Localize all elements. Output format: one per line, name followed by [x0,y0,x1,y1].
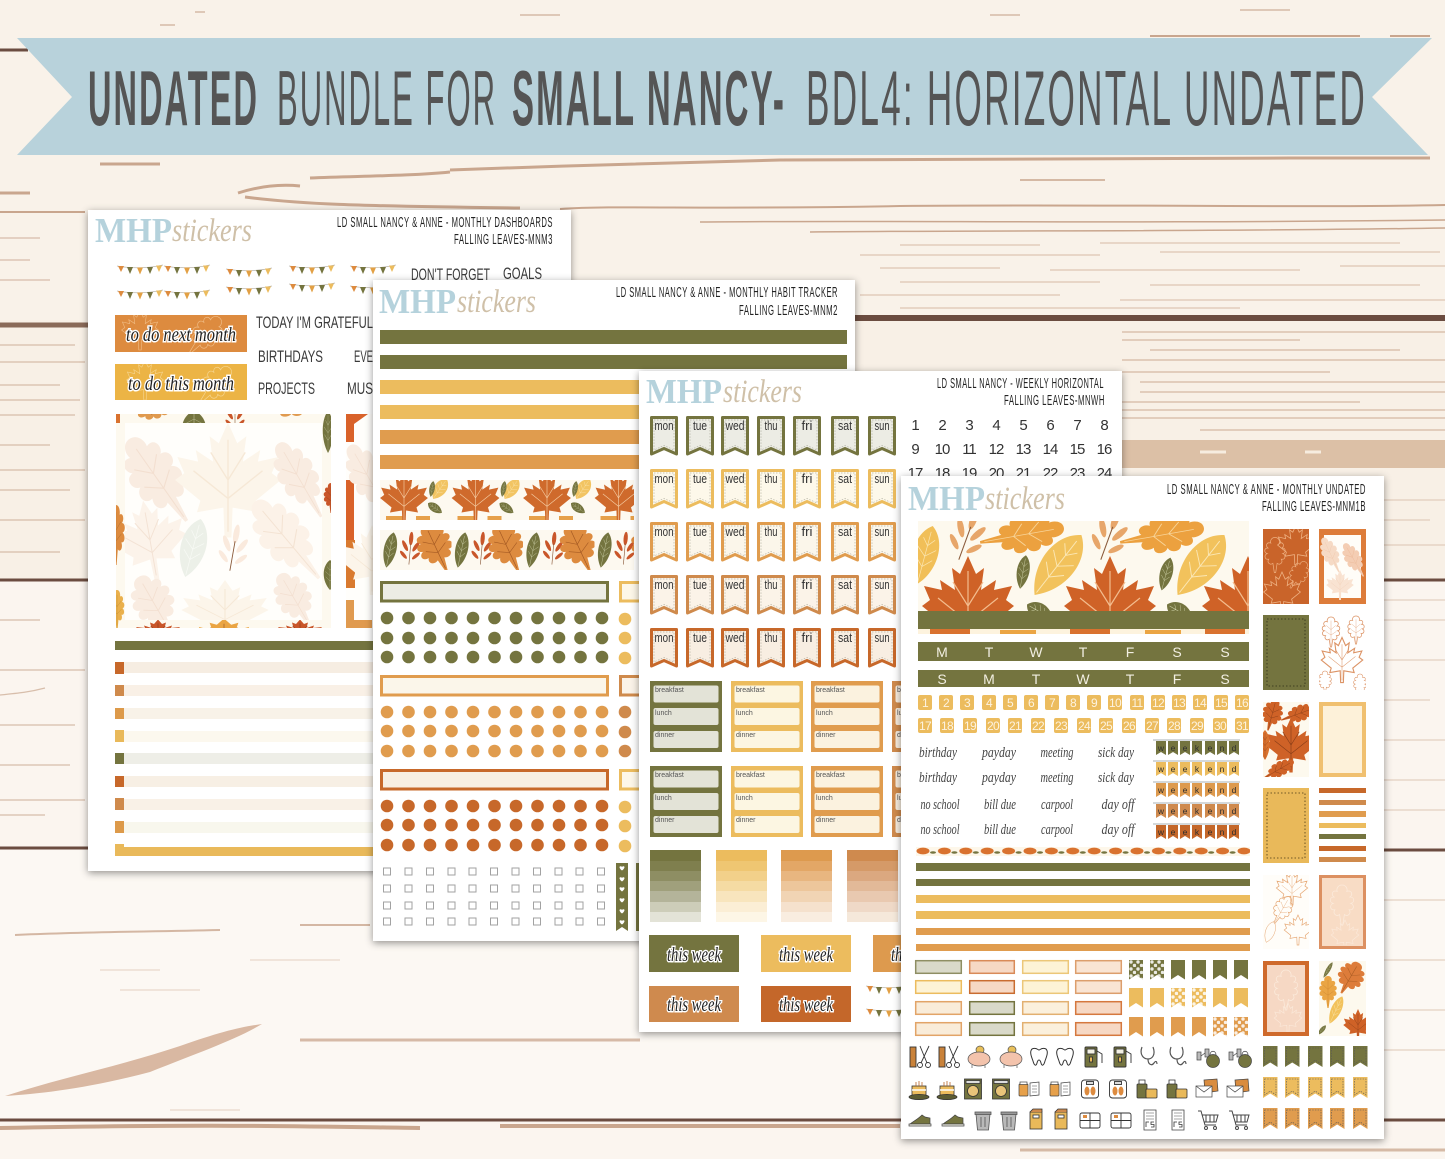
sheet 2: monthly habit tracker [373,280,855,941]
calendar numbers: 5 [1019,417,1027,434]
header labels: TODAY I'M GRATEFUL [256,313,373,332]
script event words: no school [920,797,960,813]
sheet title: FALLING LEAVES-MNWH [1004,393,1105,409]
calendar numbers: 9 [911,441,919,458]
date squares: 16 [1236,696,1249,710]
title boxes [382,582,650,789]
weekday flags: sat [838,524,852,539]
weekday flags: mon [654,524,674,539]
weekday flags: mon [654,630,674,645]
weekend banners: e [1183,827,1188,837]
this week labels: this week [667,994,722,1016]
calendar numbers: 6 [1046,417,1054,434]
weekend banners: d [1232,764,1237,774]
sheet 1: monthly dashboards [88,210,571,871]
header labels: DON'T FORGET [411,265,490,284]
weekend banners: d [1232,785,1237,795]
meal planner blocks: breakfast [655,687,684,694]
logo: stickers [985,481,1065,517]
logo [380,289,536,313]
small title boxes [916,961,1121,1035]
heart strip [616,863,640,931]
leaf washi strips [380,480,634,570]
sheet 3: weekly horizontal [639,371,1122,1032]
sheet title [616,287,838,315]
this week labels: this week [779,994,834,1016]
this week labels [649,935,901,1022]
weekday flags: tue [693,577,707,592]
sheet title: FALLING LEAVES-MNM3 [454,232,553,248]
weekday flags: tue [693,418,707,433]
bunting stickers [866,986,901,1018]
dot stickers: orange [381,706,608,757]
calendar numbers: 24 [1097,465,1112,482]
weekend banners: e [1171,743,1176,753]
weekday flags: thu [764,630,778,645]
meal planner blocks: lunch [897,795,914,802]
logo [646,379,802,403]
meal planner blocks: breakfast [736,772,765,779]
pennant flags [1129,960,1248,1036]
date squares: 9 [1091,696,1098,710]
banner heading: UNDATED [88,54,259,142]
weekday bars: T [1079,644,1088,660]
calendar numbers: 7 [1073,417,1081,434]
meal planner blocks: dinner [816,732,836,739]
dot stickers: olive [381,612,608,663]
meal planner blocks: breakfast [655,772,684,779]
logo: MHP [379,282,456,321]
leaf box two [346,414,373,628]
sheet title: FALLING LEAVES-MNM2 [739,303,838,319]
date squares: 5 [1007,696,1014,710]
weekday bars: W [1076,671,1090,687]
weekend banners: n [1220,827,1225,837]
weekday flags: sun [874,577,890,592]
logo: stickers [457,284,536,320]
sheet title [938,378,1104,405]
weekend banners: e [1171,827,1176,837]
weekday flags: sat [838,630,852,645]
weekday flags: fri [802,577,813,592]
date squares: 30 [1214,719,1227,733]
weekend banners: e [1183,743,1188,753]
weekday flags: wed [725,577,744,592]
weekend banners: w [1157,764,1165,774]
script event words: carpool [1041,822,1073,838]
calendar numbers: 4 [992,417,1000,434]
calendar numbers: 19 [962,465,977,482]
script event words: meeting [1040,745,1074,761]
header labels [256,264,542,398]
weekend banners: e [1171,764,1176,774]
weekday bars: M [936,644,948,660]
calendar numbers: 15 [1070,441,1085,458]
sheet title [337,215,553,248]
sheet title [1167,482,1366,515]
date squares: 6 [1028,696,1035,710]
calendar numbers: 20 [989,465,1004,482]
script event words: day off [1102,797,1136,813]
weekday flags [652,418,894,666]
date squares: 22 [1032,719,1045,733]
date squares: 24 [1078,719,1091,733]
weekday flags: thu [764,471,778,486]
weekday flags: mon [654,418,674,433]
weekday flags: tue [693,630,707,645]
sheet title: LD SMALL NANCY & ANNE - MONTHLY DASHBOARDS [337,215,553,231]
calendar numbers: 16 [1097,441,1112,458]
weekday flags: sun [874,630,890,645]
weekday flags: sun [874,524,890,539]
calendar numbers: 23 [1070,465,1085,482]
mini leaf washi [916,847,1250,856]
weekday bars: S [1220,671,1230,687]
date squares: 14 [1194,696,1207,710]
weekend banners: k [1195,785,1200,795]
script event words: payday [981,745,1016,761]
script event words: payday [981,770,1016,786]
to do next month label [115,315,247,352]
weekend banners: e [1171,785,1176,795]
date squares: 20 [987,719,1000,733]
weekend banners: k [1195,764,1200,774]
date squares: 23 [1055,719,1068,733]
script event words: day off [1102,822,1136,838]
weekday bars: F [1173,671,1181,687]
date squares: 18 [941,719,954,733]
script event words: sick day [1098,770,1134,786]
date squares: 19 [964,719,977,733]
this week labels: this week [667,944,722,966]
date squares: 11 [1131,696,1144,710]
large leaf header panel [918,521,1249,634]
meal planner blocks: lunch [655,710,672,717]
weekend banners: k [1195,806,1200,816]
calendar numbers: 8 [1100,417,1108,434]
date squares: 4 [986,696,993,710]
weekday bars: S [1172,644,1182,660]
calendar numbers: 17 [908,465,923,482]
weekend banners: n [1220,806,1225,816]
weekday flags: sat [838,577,852,592]
leaf box one [116,414,331,628]
calendar numbers: 11 [962,441,976,458]
weekday flags: tue [693,471,707,486]
this week labels: this week [891,944,946,966]
meal planner blocks: dinner [655,817,675,824]
script event words: meeting [1040,770,1074,786]
meal planner blocks: lunch [655,795,672,802]
weekend banners: n [1220,785,1225,795]
this week labels: this week [779,944,834,966]
weekday flags: wed [725,630,744,645]
weekend banners: w [1157,785,1165,795]
meal planner blocks: breakfast [897,687,926,694]
weekday bars: F [1126,644,1134,660]
weekday bars: T [985,644,994,660]
date squares: 31 [1236,719,1249,733]
meal planner blocks: dinner [897,732,917,739]
weekday bars: W [1029,644,1043,660]
banner heading: BUNDLE FOR [277,54,497,142]
calendar numbers: 21 [1016,465,1031,482]
meal planner blocks: dinner [736,732,756,739]
calendar numbers [909,420,1112,476]
right column dashed flags [1263,1046,1368,1129]
calendar numbers: 14 [1043,441,1058,458]
weekday flags: wed [725,418,744,433]
dot stickers: rust [381,800,608,851]
meal planner blocks: lunch [736,795,753,802]
logo: MHP [646,372,722,411]
meal planner blocks: lunch [816,795,833,802]
script event words [919,745,1136,838]
weekend banners: e [1183,785,1188,795]
weekend banners: w [1157,743,1165,753]
date squares: 17 [919,719,932,733]
logo: MHP [95,211,172,250]
meal planner blocks: breakfast [897,772,926,779]
date squares: 28 [1168,719,1181,733]
meal planner blocks: breakfast [816,772,845,779]
calendar numbers: 3 [965,417,973,434]
script event words: sick day [1098,745,1134,761]
logo [95,211,252,250]
olive header stripe [115,641,373,650]
weekday bars: T [1126,671,1135,687]
script event words: birthday [919,745,957,761]
script event words: no school [920,822,960,838]
calendar numbers: 2 [938,417,946,434]
weekday flags: thu [764,577,778,592]
logo [908,479,1065,518]
weekend banners: n [1220,764,1225,774]
to do this month label: to do this month [128,373,234,395]
checkbox grid [384,868,604,925]
weekend banners: n [1220,743,1225,753]
meal planner blocks [650,681,901,837]
calendar numbers: 1 [911,417,919,434]
weekend banners: k [1195,827,1200,837]
weekday flags: fri [802,418,813,433]
weekend banners: d [1232,743,1237,753]
icon stickers: row two [909,1079,1249,1100]
date squares: 29 [1191,719,1204,733]
meal planner blocks: lunch [816,710,833,717]
header labels: MUS [347,379,373,398]
header labels: PROJECTS [258,379,315,398]
sheet 4: monthly undated [901,476,1384,1139]
date squares: 12 [1152,696,1165,710]
date squares: 3 [964,696,971,710]
to do next month label: to do next month [126,324,236,346]
weekend banners: e [1208,785,1213,795]
calendar numbers: 18 [935,465,950,482]
weekend banners: e [1208,806,1213,816]
date squares: 13 [1173,696,1186,710]
header labels: EVE [354,347,373,366]
banner heading: SMALL NANCY- [512,54,786,142]
date squares: 27 [1146,719,1159,733]
weekend banners: e [1183,806,1188,816]
meal planner blocks: lunch [736,710,753,717]
sheet title: LD SMALL NANCY & ANNE - MONTHLY HABIT TRACKER [616,285,838,301]
logo: stickers [172,213,252,249]
script event words: birthday [919,770,957,786]
weekend banners: d [1232,806,1237,816]
weekend banners: e [1208,743,1213,753]
logo: stickers [723,374,802,410]
weekend banners: d [1232,827,1237,837]
to do this month label [115,364,247,400]
weekday flags: mon [654,471,674,486]
sheet title: LD SMALL NANCY - WEEKLY HORIZONTAL [937,376,1104,392]
weekday flags: fri [802,630,813,645]
weekend banners: w [1157,806,1165,816]
script event words: bill due [984,822,1016,838]
calendar numbers: 22 [1043,465,1058,482]
title banner [17,38,1432,155]
weekday bars: S [937,671,947,687]
weekend banners [1153,740,1240,839]
weekday flags: thu [764,524,778,539]
date squares: 1 [922,696,929,710]
right column leaf and colour panels [1263,529,1366,1036]
weekday bars: M [983,671,995,687]
icon stickers: row three [909,1109,1249,1130]
meal planner blocks: dinner [897,817,917,824]
meal planner blocks: breakfast [816,687,845,694]
meal planner blocks: dinner [816,817,836,824]
calendar numbers: 12 [989,441,1004,458]
weekday flags: sat [838,471,852,486]
weekend banners: w [1157,827,1165,837]
date squares: 15 [1215,696,1228,710]
meal planner blocks: lunch [897,710,914,717]
lined stripes with colour tabs [115,662,373,856]
date squares [918,695,1249,733]
colour stripes [916,863,1250,951]
weekend banners: e [1171,806,1176,816]
logo: MHP [908,479,985,518]
weekday bars [918,642,1249,687]
date squares: 26 [1123,719,1136,733]
date squares: 10 [1109,696,1122,710]
header labels: GOALS [503,264,542,283]
meal planner blocks: dinner [655,732,675,739]
date squares: 7 [1049,696,1056,710]
weekday bars: T [1032,671,1041,687]
weekday bars: S [1220,644,1230,660]
meal planner blocks: dinner [736,817,756,824]
weekday flags: thu [764,418,778,433]
bunting stickers [117,265,396,300]
weekday flags: fri [802,524,813,539]
date squares: 8 [1070,696,1077,710]
weekday flags: tue [693,524,707,539]
weekend banners: e [1208,764,1213,774]
gradient swatch stacks [650,850,898,922]
weekday flags: wed [725,524,744,539]
weekday flags: sun [874,471,890,486]
weekend banners: e [1208,827,1213,837]
weekday flags: sat [838,418,852,433]
weekend banners: k [1195,743,1200,753]
icon stickers: row one [910,1046,1252,1068]
extra dot column [619,613,631,852]
meal planner blocks: breakfast [736,687,765,694]
script event words: carpool [1041,797,1073,813]
weekday flags: wed [725,471,744,486]
date squares: 25 [1100,719,1113,733]
weekday flags: mon [654,577,674,592]
header labels: BIRTHDAYS [258,347,323,366]
weekday flags: sun [874,418,890,433]
date squares: 2 [943,696,950,710]
header stripes [380,330,847,469]
script event words: bill due [984,797,1016,813]
weekday flags: fri [802,471,813,486]
date squares: 21 [1009,719,1022,733]
weekend banners: e [1183,764,1188,774]
calendar numbers: 10 [935,441,950,458]
calendar numbers: 13 [1016,441,1031,458]
